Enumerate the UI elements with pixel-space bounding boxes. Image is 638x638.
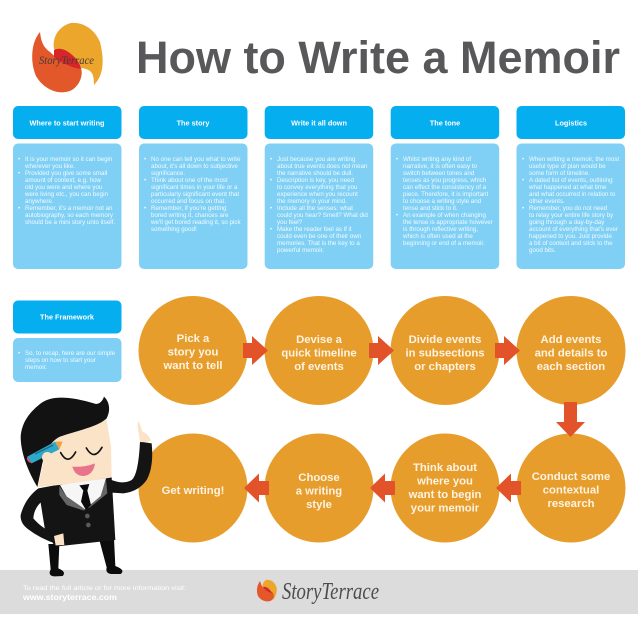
left arm on hip bbox=[21, 488, 58, 544]
panel: the framework: steps on how to start your bbox=[25, 357, 96, 364]
panel: logistics: some form of timeline. bbox=[529, 170, 590, 177]
panel: the story: significant times in your life or a bbox=[151, 184, 238, 191]
panel: the story: Remember, if you're getting bbox=[151, 205, 227, 212]
step 4: and details to bbox=[535, 348, 608, 360]
panel: the story: particularly significant event that bbox=[151, 191, 239, 198]
legs and feet bbox=[48, 538, 122, 576]
panel: write it all down: Just because you are writing bbox=[277, 156, 356, 163]
panel: write it all down: could even be one of their own bbox=[277, 233, 362, 240]
step 7: a writing bbox=[296, 486, 342, 498]
arrow: step 5 to 6 bbox=[496, 474, 521, 502]
panel: where to start writing: Provided you give some small bbox=[25, 170, 107, 177]
panel: logistics: happened to you. Just provide bbox=[529, 233, 612, 240]
panel: the tone: An example of when changing bbox=[403, 212, 486, 219]
title: How to Write a Memoir bbox=[136, 32, 620, 83]
panel: logistics: going through a day-by-day bbox=[529, 219, 605, 226]
panel: the story: No one can tell you what to write bbox=[151, 156, 241, 163]
step 2: of events bbox=[294, 361, 344, 373]
shirt bbox=[60, 478, 106, 509]
panel: write it all down: about true events does not mean bbox=[277, 163, 368, 170]
step 8: Get writing! bbox=[162, 485, 224, 497]
panel: the tone bbox=[391, 106, 499, 269]
panel: the tone: which is often used at the bbox=[402, 233, 473, 240]
arrow: step 7 to 8 bbox=[244, 474, 269, 502]
panel: logistics: • bbox=[522, 177, 524, 184]
panel: write it all down: • bbox=[270, 177, 272, 184]
panel: the story: occurred and focus on that. bbox=[151, 198, 226, 205]
torso bbox=[38, 477, 115, 547]
panel: the story: • bbox=[144, 205, 146, 212]
panel: the story: The story bbox=[177, 118, 210, 128]
panel: write it all down: to convey everything that you bbox=[277, 184, 358, 191]
step 4: Add events bbox=[541, 334, 601, 346]
step 6 bbox=[390, 434, 500, 542]
step 5 bbox=[516, 434, 626, 542]
panel: the story: • bbox=[144, 177, 146, 184]
panel: logistics: • bbox=[522, 205, 524, 212]
panel: logistics: Remember, you do not need bbox=[529, 205, 608, 212]
panel: where to start writing: • bbox=[18, 205, 20, 212]
step 2: Devise a bbox=[296, 334, 343, 346]
panel: the tone: narrative, it is often easy to bbox=[403, 163, 478, 170]
step 1: want to tell bbox=[162, 360, 222, 372]
panel: logistics: what happened at what time bbox=[528, 184, 607, 191]
panel: where to start writing: anywhere. bbox=[25, 198, 54, 205]
step 2: quick timeline bbox=[281, 348, 357, 360]
raised right arm bbox=[110, 442, 152, 493]
footer bar: www.storyterrace.com bbox=[22, 592, 117, 602]
panel: the story: • bbox=[144, 156, 146, 163]
footer bar: To read the full article or for more information visit: bbox=[23, 585, 186, 592]
panel: where to start writing: • bbox=[18, 170, 20, 177]
panel: the story: Think about one of the most bbox=[151, 177, 228, 184]
panel: the framework bbox=[13, 300, 122, 382]
panel: logistics: A dated list of events, outlining bbox=[529, 177, 613, 184]
logo: StoryTerrace footer: StoryTerrace bbox=[282, 579, 379, 605]
step 3: in subsections bbox=[405, 348, 485, 360]
panel: the story: significance. bbox=[151, 170, 185, 177]
panel: write it all down: you feel? bbox=[277, 219, 303, 226]
panel: write it all down: • bbox=[270, 226, 272, 233]
step 3: Divide events bbox=[409, 334, 481, 346]
panel: logistics: and what occurred in relation to bbox=[529, 191, 616, 198]
panel: where to start writing: amount of context, e.g. how bbox=[25, 177, 102, 184]
collar bbox=[59, 479, 107, 511]
panel: write it all down: could you hear? Smell? What did bbox=[277, 212, 368, 219]
arrow: step 4 to 5 bbox=[556, 402, 585, 437]
panel: the framework: • bbox=[18, 350, 20, 357]
panel: logistics: to relay your entire life story by bbox=[529, 212, 614, 219]
panel: the tone: tense and stick to it. bbox=[403, 205, 458, 212]
step 6: want to begin bbox=[408, 489, 481, 501]
panel: the framework: memoir. bbox=[25, 364, 47, 371]
step 3: or chapters bbox=[414, 361, 476, 373]
step 1: Pick a bbox=[177, 333, 210, 345]
footer bar bbox=[0, 570, 638, 614]
panel: write it all down: • bbox=[270, 156, 272, 163]
panel: the story: we'll get bored reading it, so pick bbox=[150, 219, 241, 226]
panel: the tone: Whilst writing any kind of bbox=[403, 156, 471, 163]
panel: the tone: to choose a writing style and bbox=[403, 198, 482, 205]
step 7: Choose bbox=[298, 472, 340, 484]
step 6: your memoir bbox=[411, 502, 480, 514]
panel: where to start writing: Where to start writing bbox=[30, 118, 104, 128]
step 2 bbox=[264, 296, 374, 405]
step 1 bbox=[138, 296, 248, 405]
step 4 bbox=[516, 296, 626, 405]
panel: the tone: can effect the consistency of a bbox=[403, 184, 487, 191]
panel: the story: about, it's all down to subjective bbox=[151, 163, 238, 170]
panel: logistics: a bit of context and stick to the bbox=[529, 240, 613, 247]
panel: write it all down: • bbox=[270, 205, 272, 212]
panel: where to start writing: It is your memoir so it can begin bbox=[25, 156, 113, 163]
panel: logistics: When writing a memoir, the most bbox=[529, 156, 619, 163]
panel: write it all down: experience when you recount bbox=[277, 191, 358, 198]
step 8 bbox=[138, 434, 248, 542]
step 5: contextual bbox=[543, 484, 599, 496]
panel: the framework: So, to recap, here are our simple bbox=[25, 350, 116, 357]
panel: logistics: good bits. bbox=[529, 247, 556, 254]
panel: write it all down bbox=[265, 106, 373, 269]
panel: the story bbox=[139, 106, 248, 269]
panel: the tone: • bbox=[396, 156, 398, 163]
hair bbox=[21, 397, 109, 487]
arrow: step 3 to 4 bbox=[495, 336, 520, 365]
panel: logistics: Logistics bbox=[555, 118, 587, 128]
panel: write it all down: the memory in your mind. bbox=[277, 198, 347, 205]
buttons bbox=[85, 514, 91, 527]
step 4: each section bbox=[537, 361, 605, 373]
eyes bbox=[61, 447, 102, 459]
panel: the tone: switch between tones and bbox=[403, 170, 475, 177]
step 5: Conduct some bbox=[532, 471, 610, 483]
panel: the tone: • bbox=[396, 212, 398, 219]
step 6: Think about bbox=[413, 462, 477, 474]
panel: the tone: is through reflective writing, bbox=[403, 226, 478, 233]
panel: write it all down: the narrative should be dull. bbox=[277, 170, 353, 177]
face bbox=[38, 420, 112, 487]
panel: the tone: the tense is appropriate however bbox=[403, 219, 493, 226]
panel: write it all down: powerful memoir. bbox=[277, 247, 324, 254]
arrow: step 1 to 2 bbox=[243, 336, 268, 365]
panel: the tone: tenses as you progress, which bbox=[403, 177, 487, 184]
lower hand bbox=[54, 533, 64, 545]
step 1: story you bbox=[168, 346, 219, 358]
step 5: research bbox=[547, 498, 595, 510]
arrow: step 6 to 7 bbox=[370, 474, 395, 502]
panel: logistics: account of everything that's ever bbox=[529, 226, 618, 233]
character: businessman with pencil behind ear bbox=[21, 397, 152, 576]
panel: where to start writing: wherever you like. bbox=[24, 163, 75, 170]
panel: write it all down: Make the reader feel as if it bbox=[277, 226, 352, 233]
panel: write it all down: Description is key, you need bbox=[277, 177, 354, 184]
panel: write it all down: Include all the senses: what bbox=[277, 205, 353, 212]
panel: where to start writing: were living etc., you can begin bbox=[24, 191, 108, 198]
panel: logistics: • bbox=[522, 156, 524, 163]
logo: StoryTerrace footer bbox=[257, 579, 379, 605]
step 7: style bbox=[306, 499, 332, 511]
logo: StoryTerrace top: StoryTerrace bbox=[39, 53, 95, 67]
panel: logistics bbox=[516, 106, 625, 269]
panel: the story: bored writing it, chances are bbox=[151, 212, 229, 219]
tie bbox=[79, 484, 91, 510]
mouth bbox=[72, 463, 95, 476]
panel: where to start writing: old you were and where you bbox=[25, 184, 103, 191]
panel: the framework: The Framework bbox=[40, 312, 95, 322]
panel: write it all down: Write it all down bbox=[291, 118, 347, 128]
step 7 bbox=[264, 434, 374, 542]
panel: where to start writing: should be a mini story unto itself. bbox=[25, 219, 115, 226]
step 3 bbox=[390, 296, 500, 405]
panel: where to start writing: Remember, it's a memoir not an bbox=[25, 205, 113, 212]
panel: where to start writing: • bbox=[18, 156, 20, 163]
panel: the story: something good! bbox=[151, 226, 197, 233]
panel: the tone: The tone bbox=[430, 118, 460, 128]
panel: write it all down: memories. That is the key to a bbox=[277, 240, 360, 247]
panel: where to start writing: autobiography, so each memory bbox=[25, 212, 114, 219]
panel: where to start writing bbox=[13, 106, 122, 269]
logo: StoryTerrace top bbox=[32, 23, 103, 92]
step 6: where you bbox=[416, 476, 473, 488]
panel: the tone: beginning or end of a memoir. bbox=[403, 240, 485, 247]
raised hand bbox=[138, 421, 151, 442]
arrow: step 2 to 3 bbox=[369, 336, 394, 365]
panel: logistics: useful type of plan would be bbox=[529, 163, 606, 170]
pencil bbox=[27, 442, 63, 463]
panel: the tone: piece. Therefore, it is important bbox=[403, 191, 488, 198]
panel: logistics: other events. bbox=[529, 198, 565, 205]
